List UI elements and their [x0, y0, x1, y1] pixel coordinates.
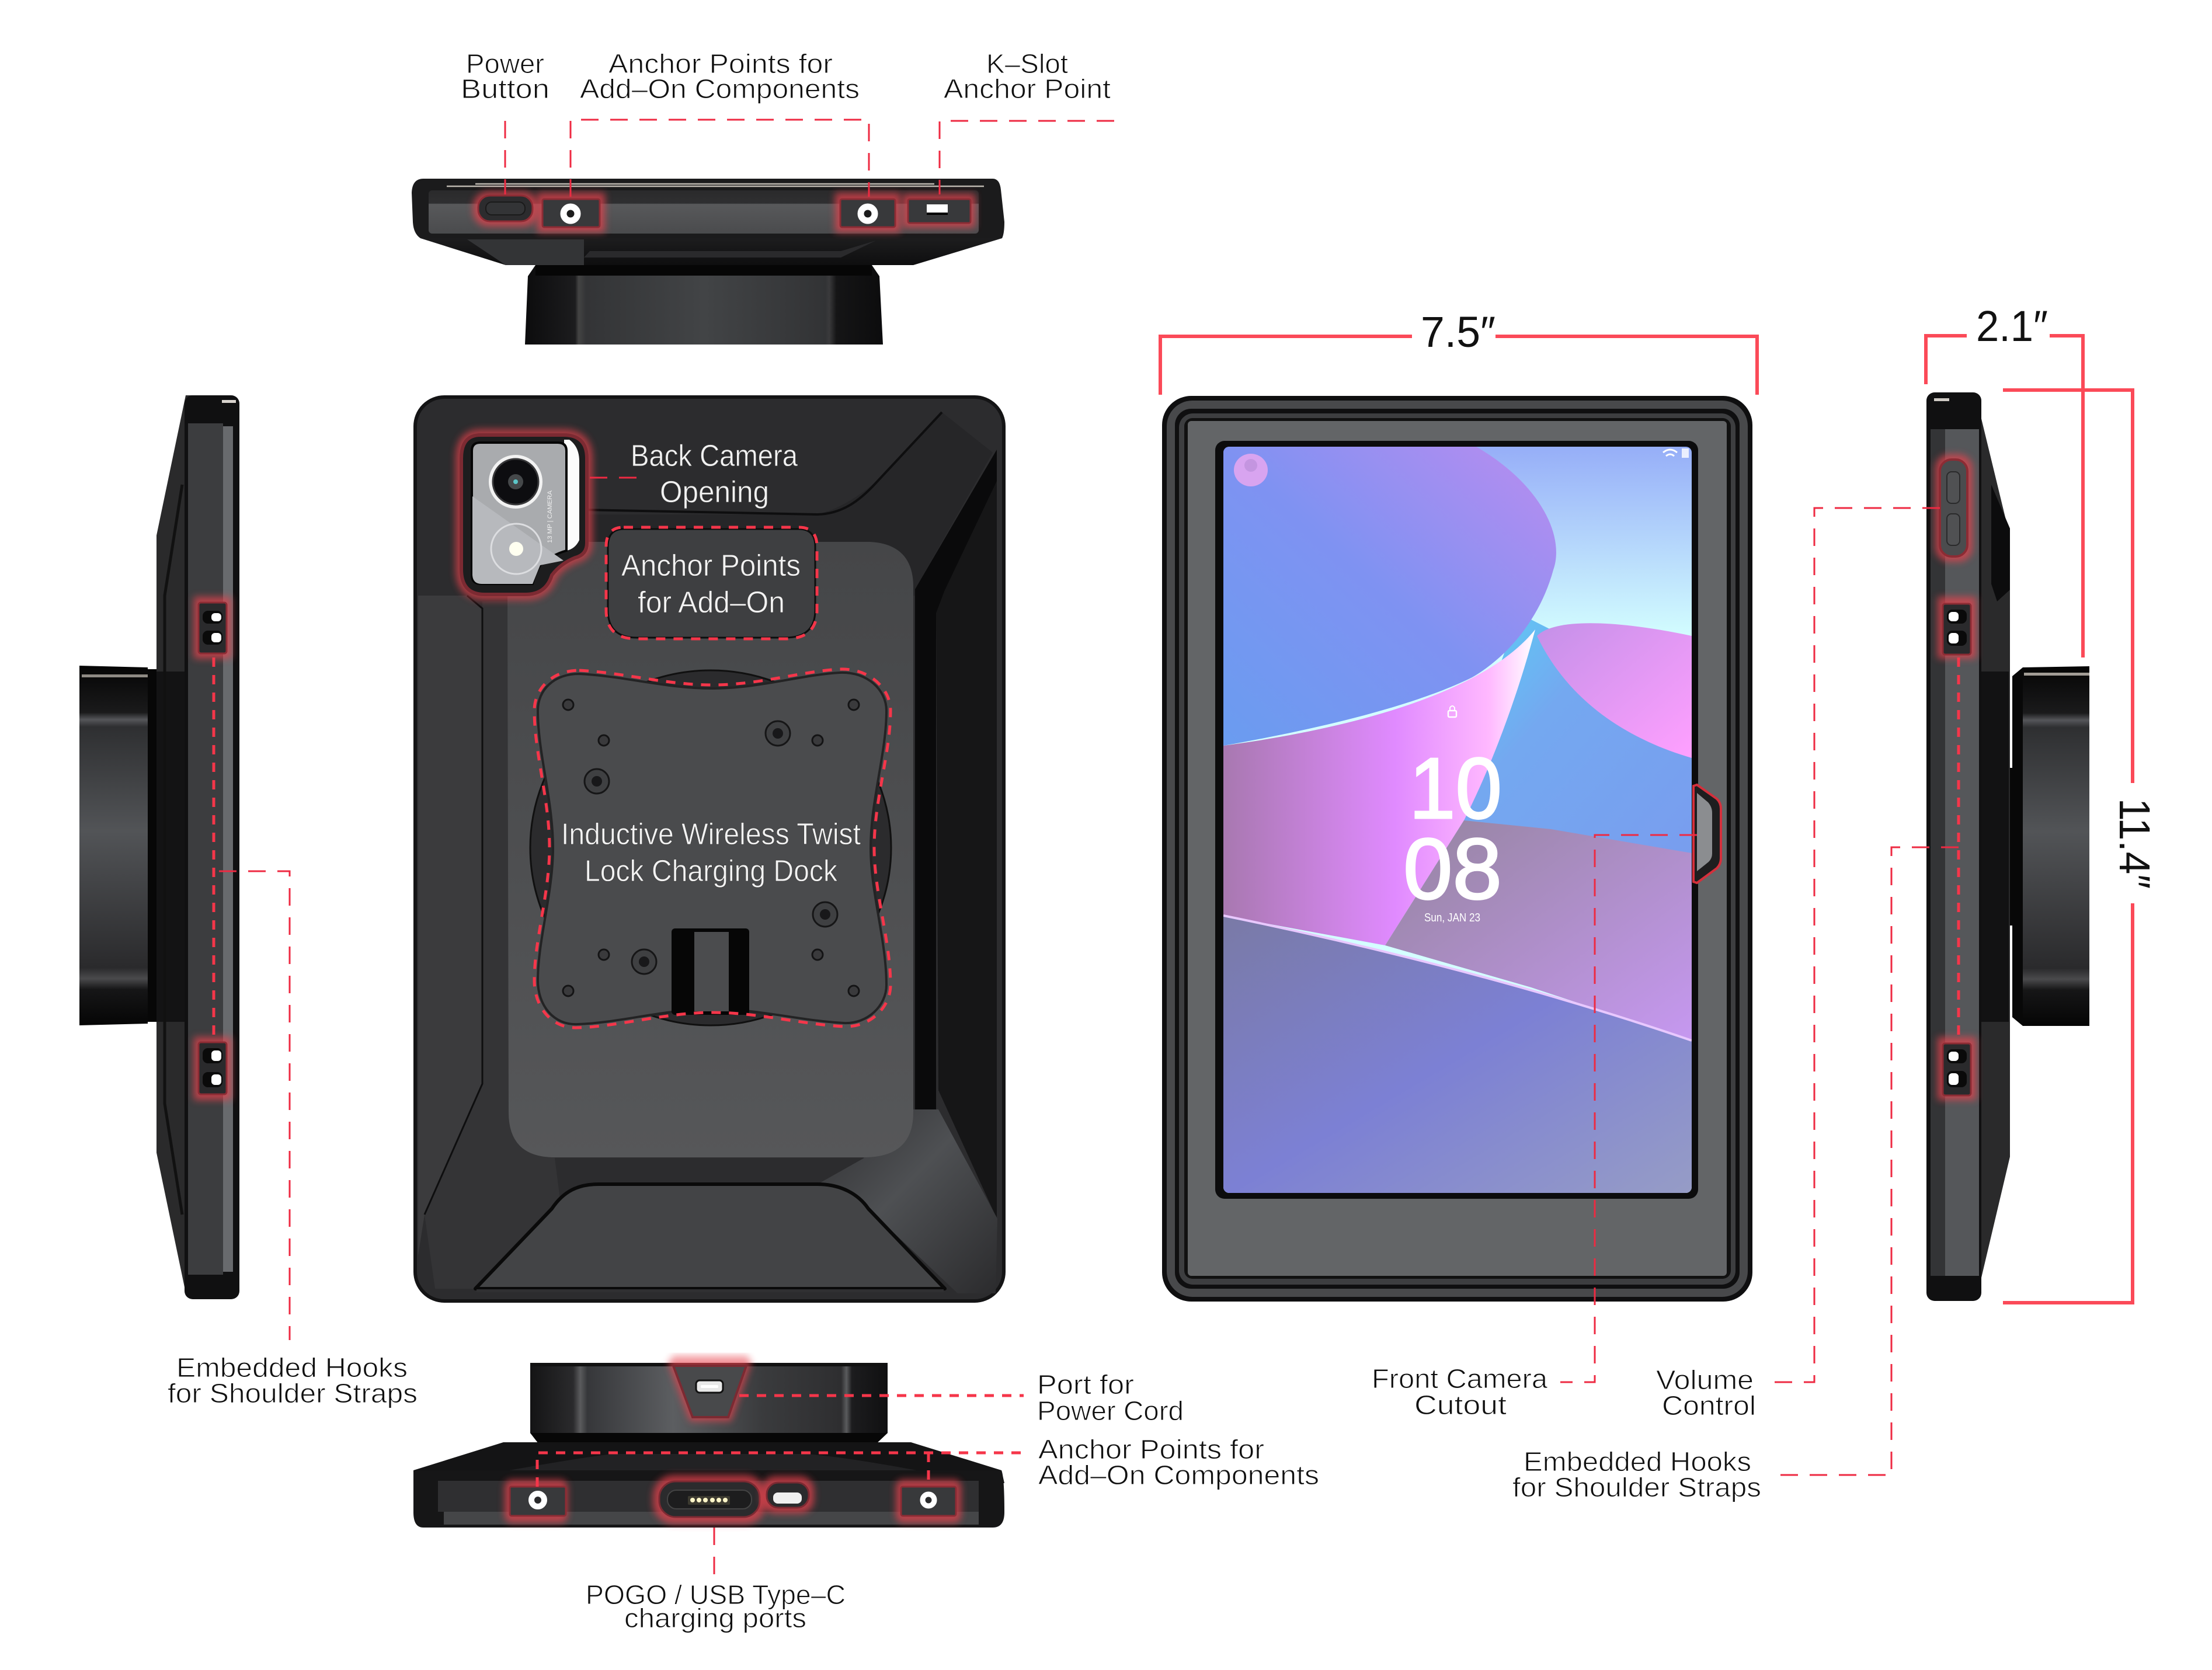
leader: k-slot — [940, 121, 1114, 194]
label: power button: Power — [466, 48, 544, 79]
label: bottom anchor points — [1038, 1434, 1319, 1490]
wireless charging dock plate: Lock Charging Dock — [585, 854, 838, 888]
label: left embedded hooks: Embedded Hooks — [176, 1352, 408, 1383]
label: right embedded hooks: for Shoulder Straps — [1512, 1472, 1761, 1502]
label: bottom anchor points: Add–On Components — [1038, 1460, 1319, 1490]
leader: pogo — [714, 1528, 715, 1579]
label: volume control: Volume — [1656, 1365, 1754, 1395]
right side view of tablet — [1926, 392, 2089, 1301]
label: pogo usb-c: POGO / USB Type–C — [586, 1579, 846, 1610]
status icons — [1663, 448, 1689, 458]
label: power button: Button — [461, 74, 549, 104]
wireless charging dock plate: Inductive Wireless Twist — [561, 817, 861, 851]
leader: port for power cord — [739, 1394, 1024, 1397]
label: port for power cord — [1037, 1369, 1184, 1426]
lower-right facet — [818, 1109, 997, 1293]
label: top anchor points: Anchor Points for — [608, 48, 833, 79]
leader: power button — [505, 121, 506, 194]
label: k-slot: K–Slot — [986, 48, 1068, 79]
wireless charging dock plate — [530, 669, 891, 1028]
left crease — [425, 596, 482, 1215]
hook upper — [1938, 597, 1976, 659]
power cord port — [672, 1355, 749, 1417]
dock seen from top edge — [525, 265, 883, 345]
anchor point right highlight — [835, 193, 900, 232]
back camera label — [631, 439, 798, 509]
right black strip — [915, 450, 997, 1112]
label: port for power cord: Power Cord — [1037, 1396, 1184, 1426]
anchor points for add-on callout: Anchor Points — [621, 549, 801, 583]
back camera label: Back Camera — [631, 439, 798, 473]
area below the curved crease — [584, 412, 993, 596]
back camera module — [461, 435, 587, 594]
volume buttons — [1935, 454, 1973, 562]
chamfered top — [413, 1442, 1004, 1483]
left side view of tablet — [79, 395, 239, 1299]
pogo connector — [653, 1475, 766, 1524]
screen wallpaper — [1223, 447, 1692, 1193]
clock — [1403, 740, 1502, 924]
grey inner frame — [1188, 421, 1727, 1276]
label: top anchor points: Add–On Components — [580, 74, 860, 104]
bottom anchor left — [505, 1480, 568, 1523]
label: power button — [461, 48, 549, 104]
label: volume control — [1656, 1365, 1756, 1421]
case body band — [412, 179, 1004, 238]
usb type-c connector — [761, 1476, 814, 1514]
label: top anchor points — [580, 48, 860, 104]
lower trapezoid — [475, 1184, 945, 1289]
body band — [413, 1470, 1004, 1528]
leader: left hooks — [219, 871, 290, 1340]
dimension: depth 2.1 inches — [1926, 302, 2083, 657]
back camera module: 13 MP | CAMERA — [547, 490, 554, 543]
label: right embedded hooks — [1512, 1446, 1761, 1502]
outer rim — [1162, 396, 1752, 1302]
hook connector line — [213, 657, 215, 1042]
label: right embedded hooks: Embedded Hooks — [1524, 1446, 1751, 1477]
white strip — [564, 440, 579, 551]
k-slot highlight — [903, 194, 975, 228]
label: pogo usb-c: charging ports — [624, 1603, 806, 1633]
dimension: height 11.4 inches: 11.4″ — [2110, 798, 2159, 889]
label: front camera cutout: Cutout — [1414, 1390, 1507, 1420]
anchor points for add-on callout: for Add–On — [638, 586, 785, 620]
case body — [414, 396, 1005, 1302]
curved crease — [584, 412, 942, 514]
bottom anchor right — [896, 1480, 961, 1523]
dashed dock outline — [534, 669, 891, 1028]
side face — [185, 395, 239, 1299]
back view of tablet — [414, 396, 1005, 1302]
back camera leader — [590, 476, 645, 479]
screen bezel — [1215, 441, 1698, 1199]
left side facet — [418, 596, 482, 1255]
label: pogo usb-c — [586, 1579, 846, 1633]
back camera label: Opening — [660, 475, 769, 509]
label: left embedded hooks — [168, 1352, 418, 1408]
leader: front camera — [1560, 835, 1697, 1382]
label: front camera cutout — [1372, 1363, 1547, 1420]
hook upper — [194, 597, 231, 659]
dimension: depth 2.1 inches: 2.1″ — [1976, 302, 2048, 350]
centre shadow under panel — [555, 1158, 864, 1204]
anchor point left highlight — [537, 193, 605, 232]
hook lower — [1938, 1037, 1976, 1100]
leader: top anchor points — [571, 120, 869, 197]
lock screen avatar — [1234, 454, 1268, 486]
clock: 10 — [1409, 740, 1502, 837]
wedge back — [156, 395, 193, 1293]
dock from right — [2010, 768, 2015, 926]
dimension: width 7.5 inches — [1160, 308, 1757, 395]
small screws — [563, 700, 859, 996]
label: k-slot: Anchor Point — [944, 74, 1111, 104]
wedge back — [1977, 399, 2010, 1297]
lock slot — [672, 928, 749, 1015]
label: bottom anchor points: Anchor Points for — [1038, 1434, 1264, 1464]
label: front camera cutout: Front Camera — [1372, 1363, 1547, 1394]
dock bottom edge — [530, 1363, 888, 1443]
camera plate — [472, 443, 566, 584]
top edge view of tablet — [412, 179, 1004, 345]
large screws — [585, 721, 837, 974]
clock: Sun, JAN 23 — [1424, 911, 1480, 924]
bottom edge view of tablet — [413, 1355, 1004, 1528]
centre strip and lower facet — [425, 601, 864, 1289]
label: volume control: Control — [1662, 1390, 1756, 1421]
leader lines — [219, 120, 1959, 1579]
leader: bottom anchor points — [537, 1453, 1024, 1487]
label: port for power cord: Port for — [1037, 1369, 1134, 1400]
hooks connector line — [1957, 657, 1960, 1043]
leader: right hooks — [1771, 847, 1959, 1475]
dimension: height 11.4 inches — [2003, 390, 2159, 1303]
lock icon — [1448, 706, 1456, 717]
label: left embedded hooks: for Shoulder Straps — [168, 1378, 418, 1408]
clock: 08 — [1403, 821, 1502, 917]
centre panel — [507, 542, 913, 1157]
anchor points for add-on callout — [606, 527, 817, 639]
power button highlight — [473, 192, 538, 227]
dimension: width 7.5 inches: 7.5″ — [1421, 308, 1495, 356]
dock from left — [148, 669, 159, 1022]
side face — [1926, 392, 1981, 1301]
leader: volume — [1773, 508, 1940, 1382]
front view of tablet — [1162, 396, 1752, 1302]
front camera cutout latch — [1693, 785, 1721, 883]
chamfered underside — [420, 238, 1002, 265]
label: k-slot — [944, 48, 1111, 104]
right dark column — [936, 481, 997, 1219]
hook lower — [194, 1037, 231, 1100]
